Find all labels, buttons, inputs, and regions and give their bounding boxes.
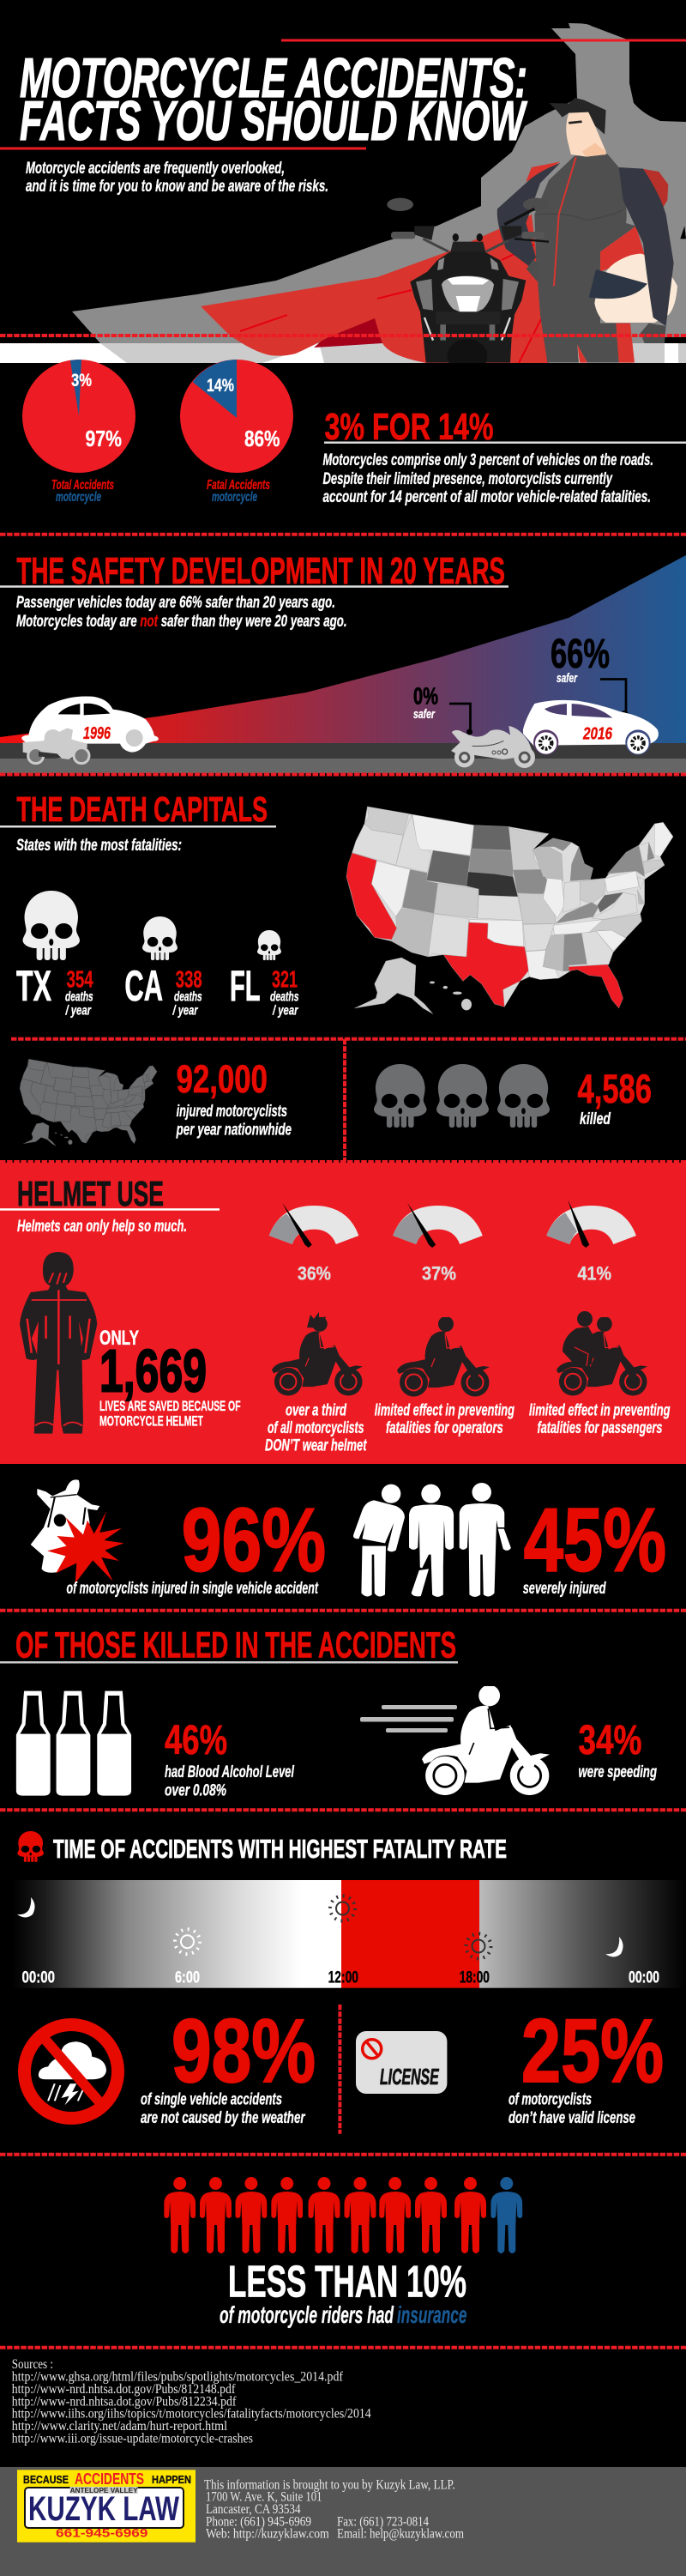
- icon: 2016 car: 2016: [582, 724, 613, 743]
- stat: killed: 4,586: [578, 1066, 652, 1111]
- stat: 45%: severely injured: [523, 1580, 606, 1598]
- stat: California: 338: [176, 966, 202, 993]
- Kuzyk Law logo: BECAUSE: [23, 2473, 69, 2486]
- pie chart: fatal accidents: Fatal Accidents: [207, 478, 270, 493]
- icon: scooter crash: [31, 1479, 123, 1583]
- icon: 1996 car: [21, 696, 159, 753]
- title underline: [0, 148, 366, 149]
- sources: http://www-nrd.nhtsa.dot.gov/Pubs/812234.pdf: [12, 2394, 237, 2409]
- heading: time of accidents: [17, 1831, 507, 1864]
- hero illustration: [0, 23, 686, 373]
- icon: skull TX: [22, 891, 80, 960]
- stat: Texas: / year: [65, 1004, 92, 1019]
- icon: grey US map: [20, 1059, 157, 1146]
- contact information: Email: help@kuzyklaw.com: [337, 2527, 464, 2542]
- time labels: 00:00: [629, 1969, 659, 1987]
- stat: 1,669 lives saved: 1,669: [99, 1338, 207, 1405]
- text: insurance: insurance: [397, 2301, 466, 2328]
- stat: 98%: are not caused by the weather: [141, 2109, 306, 2127]
- text: safety development: Passenger vehicles today are 66% safer than 20 years ago.: [16, 594, 335, 612]
- pie chart: total accidents: 97%: [86, 426, 122, 451]
- stat: 96%: 96%: [182, 1491, 326, 1591]
- icon: injured figures: [353, 1483, 511, 1597]
- icon: no weather: [24, 2025, 118, 2118]
- icon: sun morning: [175, 1929, 200, 1954]
- gauge: 41%: [546, 1200, 636, 1285]
- stat: less than 10%: LESS THAN 10%: [228, 2258, 466, 2307]
- Kuzyk Law logo: 661-945-6969: [56, 2526, 148, 2540]
- icon: moon: [17, 1897, 35, 1917]
- stat: 25%: [508, 2001, 664, 2127]
- pie chart: fatal accidents: motorcycle: [212, 490, 257, 505]
- stat: 98%: [141, 2001, 316, 2127]
- sources: http://www.clarity.net/adam/hurt-report.html: [12, 2419, 227, 2434]
- Kuzyk Law logo: ACCIDENTS: [75, 2470, 144, 2488]
- sources: Sources :: [12, 2357, 53, 2372]
- stat: 46% alcohol: [165, 1718, 294, 1800]
- icons: three skulls: [374, 1064, 550, 1128]
- stat: California: [124, 962, 202, 1019]
- contact information: Fax: (661) 723-0814: [337, 2514, 429, 2529]
- text: insurance: of motorcycle riders had: [220, 2301, 394, 2328]
- stat: 1,669 lives saved: ONLY: [99, 1327, 139, 1350]
- icon: moon evening: [605, 1937, 623, 1956]
- stat: 96%: of motorcyclists injured in single vehicle accident: [67, 1580, 318, 1598]
- caption: no helmet: DON’T wear helmet: [265, 1437, 367, 1455]
- caption: operators: limited effect in preventing: [375, 1401, 514, 1419]
- sources: http://www.iihs.org/iihs/topics/t/motorcycles/fatalityfacts/motorcycles/2014: [12, 2407, 371, 2422]
- heading: helmet use: HELMET USE: [17, 1174, 164, 1213]
- gauge: 37%: [393, 1203, 483, 1285]
- stat: 25%: of motorcyclists: [508, 2091, 592, 2109]
- contact information: Lancaster, CA 93534: [206, 2502, 300, 2517]
- icon: sun evening: [466, 1934, 490, 1958]
- caption: no helmet: over a third: [286, 1401, 346, 1419]
- stat: California: CA: [124, 962, 163, 1010]
- heading: 3% for 14%: 3% FOR 14%: [324, 406, 494, 448]
- contact information: 1700 W. Ave. K, Suite 101: [206, 2490, 322, 2505]
- pie chart: fatal accidents: 14%: [207, 376, 234, 396]
- stat: 34% speeding: 34%: [578, 1718, 641, 1763]
- heading: of those killed: OF THOSE KILLED IN THE ACCIDENTS: [15, 1625, 456, 1666]
- gauge: 36%: 36%: [298, 1263, 331, 1285]
- stat: 46% alcohol: 46%: [165, 1718, 227, 1763]
- stat: 1,669 lives saved: LIVES ARE SAVED BECAUSE OF: [99, 1398, 241, 1414]
- stat: California: deaths: [174, 990, 202, 1005]
- stat: Florida: 321: [272, 966, 298, 993]
- icons: bottles: [16, 1691, 131, 1796]
- caption: no helmet: [265, 1401, 367, 1455]
- Kuzyk Law logo: KUZYK LAW: [28, 2490, 179, 2528]
- stat: 98%: 98%: [172, 2001, 316, 2101]
- icon: 1996 scooter: [23, 728, 89, 764]
- caption: passengers: [529, 1401, 671, 1437]
- icon: 1996 car: 1996: [83, 724, 111, 743]
- gauge: 37%: 37%: [422, 1263, 456, 1285]
- stat: Florida: FL: [230, 962, 261, 1010]
- contact information: [204, 2478, 464, 2542]
- stat: 96%: [67, 1491, 326, 1598]
- icon: skull CA: [142, 916, 178, 960]
- intro text: [26, 160, 328, 196]
- icon: speed lines: [360, 1705, 457, 1732]
- caption: operators: [375, 1401, 514, 1437]
- stat: Texas: TX: [16, 962, 51, 1010]
- stat: Florida: [230, 962, 299, 1019]
- text: states with most fatalities: States with the most fatalities:: [16, 837, 182, 855]
- stat: Florida: / year: [272, 1004, 298, 1019]
- road: [0, 743, 686, 773]
- intro text: and it is time for you to know and be aware of the risks.: [26, 178, 328, 196]
- footer band: [0, 2467, 686, 2576]
- sources: http://www.ghsa.org/html/files/pubs/spotlights/motorcycles_2014.pdf: [12, 2369, 344, 2384]
- pie chart: fatal accidents: [180, 360, 293, 505]
- icon: row of people: [164, 2177, 522, 2253]
- callout: 0% safer: 0%: [413, 683, 438, 710]
- stat: injured motorcyclists: injured motorcyclists: [177, 1103, 287, 1121]
- stat: injured motorcyclists: per year nationwhide: [176, 1122, 292, 1140]
- contact information: This information is brought to you by Kuzyk Law, LLP.: [204, 2478, 455, 2493]
- Kuzyk Law logo: HAPPEN: [152, 2473, 191, 2486]
- stat: injured motorcyclists: 92,000: [177, 1057, 268, 1101]
- pie chart: total accidents: Total Accidents: [51, 478, 114, 493]
- icon: skull FL: [257, 930, 281, 960]
- icon: two riders: [557, 1311, 647, 1396]
- icon: rider figure: [20, 1252, 97, 1434]
- pie chart: total accidents: 3%: [71, 371, 92, 390]
- Kuzyk Law logo: ANTELOPE VALLEY: [70, 2487, 138, 2494]
- callout: 66% safer: [551, 632, 628, 717]
- caption: no helmet: of all motorcyclists: [268, 1419, 364, 1437]
- text: 3% for 14%: [322, 451, 653, 506]
- icon: rider with helmet: [397, 1316, 490, 1397]
- Kuzyk Law logo: [17, 2470, 196, 2543]
- stat: Texas: [16, 962, 93, 1019]
- caption: operators: fatalities for operators: [386, 1419, 503, 1437]
- text: safety development: [16, 594, 347, 631]
- stat: injured motorcyclists: [176, 1057, 292, 1140]
- callout: 66% safer: safer: [557, 671, 578, 686]
- pie chart: fatal accidents: 86%: [244, 426, 280, 451]
- US fatality map: [346, 807, 673, 1014]
- contact information: Web: http://kuzyklaw.com: [206, 2527, 329, 2542]
- stat: 98%: of single vehicle accidents: [141, 2091, 282, 2109]
- time labels: 6:00: [175, 1969, 200, 1987]
- text: safety development: Motorcycles today are not safer than they were 20 years ago.: [16, 613, 347, 631]
- icon: sun noon: [330, 1896, 355, 1920]
- icon: modern motorcycle: [451, 726, 533, 766]
- icon: license card: [356, 2031, 447, 2094]
- icon: rider without helmet: [272, 1312, 363, 1396]
- icon: speeding rider: [422, 1685, 550, 1795]
- icon: 2016 car: [523, 700, 659, 755]
- time labels: 12:00: [328, 1969, 358, 1987]
- stat: 34% speeding: [578, 1718, 657, 1781]
- text: helmets can only help: Helmets can only help so much.: [17, 1218, 187, 1236]
- time labels: 00:00: [22, 1969, 55, 1987]
- callout: 0% safer: safer: [413, 707, 436, 722]
- timeline bar: [12, 1880, 686, 1988]
- stat: 1,669 lives saved: MOTORCYCLE HELMET: [99, 1413, 203, 1430]
- stat: California: / year: [172, 1004, 198, 1019]
- gauge: 41%: 41%: [578, 1263, 611, 1285]
- pie chart: total accidents: [22, 360, 135, 505]
- stat: Texas: deaths: [65, 990, 93, 1005]
- callout: 0% safer: [413, 683, 472, 735]
- sources: http://www.iii.org/issue-update/motorcycle-crashes: [12, 2431, 253, 2446]
- stat: killed: killed: [580, 1110, 611, 1128]
- heading: death capitals: THE DEATH CAPITALS: [16, 789, 268, 829]
- stat: 46% alcohol: over 0.08%: [165, 1782, 226, 1800]
- time labels: 18:00: [460, 1969, 490, 1987]
- stat: killed: [578, 1066, 652, 1128]
- stat: 1,669 lives saved: [99, 1327, 241, 1430]
- sources: [12, 2357, 371, 2446]
- callout: 66% safer: 66%: [551, 632, 610, 677]
- icon: license card: LICENSE: [380, 2064, 439, 2089]
- time labels: [22, 1969, 659, 1987]
- sources: http://www-nrd.nhtsa.dot.gov/Pubs/812148.pdf: [12, 2382, 236, 2397]
- intro text: Motorcycle accidents are frequently overlooked,: [26, 160, 285, 178]
- contact information: Phone: (661) 945-6969: [206, 2514, 311, 2529]
- panel: helmet use: [0, 1163, 686, 1464]
- stat: Texas: 354: [67, 966, 93, 993]
- stat: Florida: deaths: [270, 990, 299, 1005]
- title: [20, 46, 527, 152]
- pie chart: total accidents: motorcycle: [56, 490, 101, 505]
- gradient safety curve: [0, 555, 686, 747]
- stat: 46% alcohol: had Blood Alcohol Level: [165, 1763, 294, 1781]
- gauge: 36%: [269, 1203, 358, 1285]
- hero top rule: [281, 39, 686, 41]
